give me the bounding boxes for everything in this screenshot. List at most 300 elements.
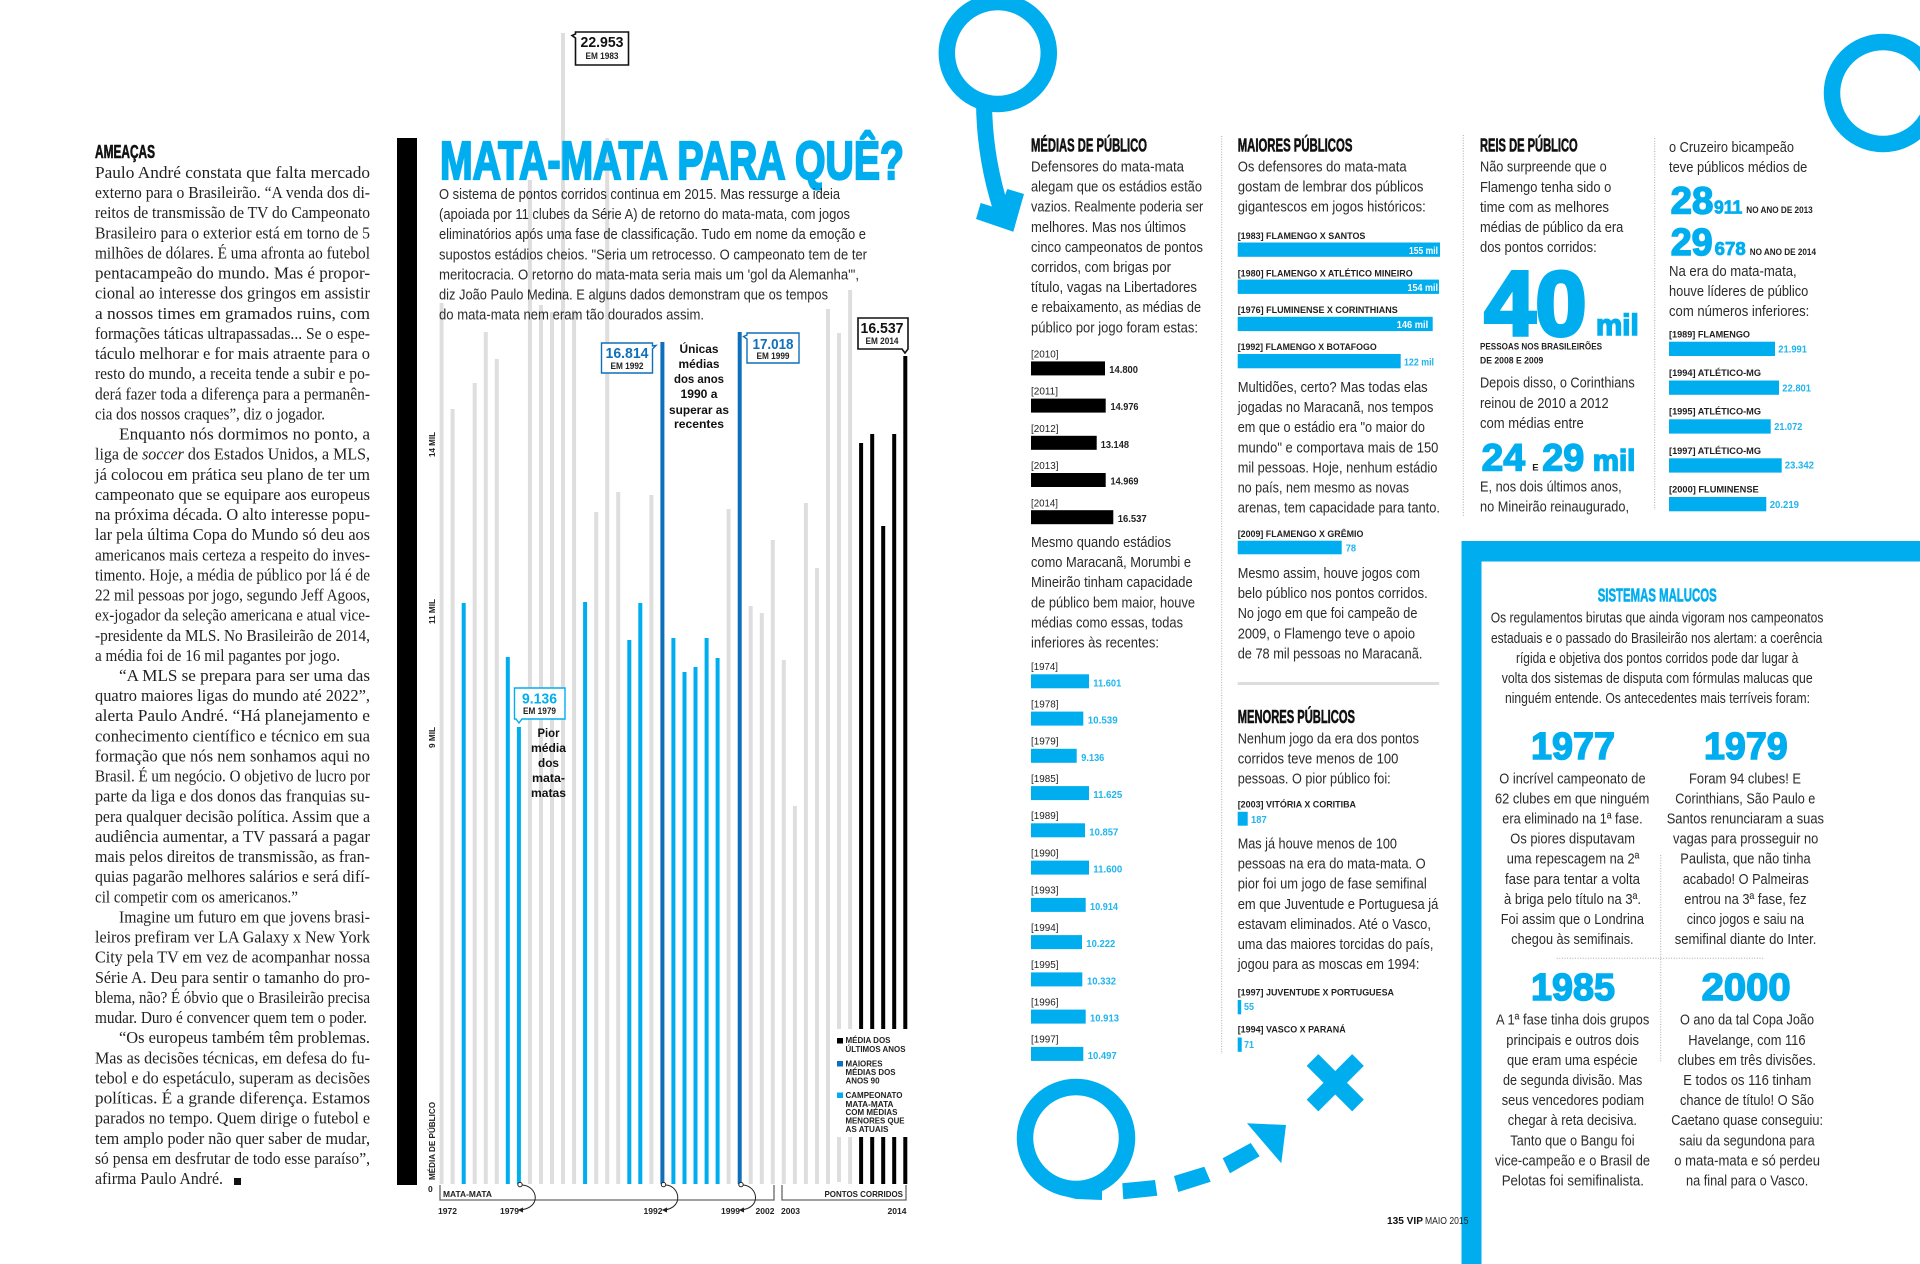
entry: 1979: entrou na 3ª fase, fez xyxy=(1684,891,1807,908)
text block: com médias entre xyxy=(1480,415,1584,432)
annotation: Únicas médias dos anos 1990: 1990 a xyxy=(680,387,718,401)
bar chart: biggest crowds: 154 mil xyxy=(1408,283,1438,294)
text block: vazios. Realmente poderia ser xyxy=(1031,199,1203,216)
text block: Os defensores do mata-mata xyxy=(1238,158,1407,176)
text block: houve líderes de público xyxy=(1669,283,1808,300)
text block: article body: já colocou em prática seu plano de ter um xyxy=(94,465,370,484)
chart x axis: era brackets and years: 2003 xyxy=(781,1206,800,1216)
entry: 1985: que eram uma espécie xyxy=(1507,1052,1638,1069)
entry: 1985: principais e outros dois xyxy=(1506,1032,1639,1049)
text block: article body: mudar. Duro é convencer quem tem o poder. xyxy=(95,1008,367,1027)
callout: 17.018 em 1999: EM 1999 xyxy=(756,351,790,361)
text block: Multidões, certo? Mas todas elas xyxy=(1238,379,1428,396)
legend: ÚLTIMOS ANOS xyxy=(846,1043,906,1054)
text block: jogadas no Maracanã, nos tempos xyxy=(1237,399,1433,416)
bar chart: mata-mata averages: 10.497 xyxy=(1088,1051,1117,1062)
callout: 16.537 em 2014: EM 2014 xyxy=(866,336,898,346)
bar chart: mata-mata averages: [1974] xyxy=(1031,662,1058,673)
annotation: Pior média dos mata-matas: dos xyxy=(538,756,559,770)
icon: tactic circle, top right xyxy=(1832,42,1920,144)
text block: article body: pera qualquer decisão política. Assim que a xyxy=(95,807,371,826)
legend: MÉDIA DOS xyxy=(846,1035,891,1045)
text block: Nenhum jogo da era dos pontos xyxy=(1238,730,1419,748)
bar chart: recent averages: [2014] xyxy=(1031,498,1058,509)
callout: 16.537 em 2014 xyxy=(858,318,908,353)
bar chart: recent averages: 14.976 xyxy=(1110,402,1139,413)
text block: intro: rígida e objetiva dos pontos corridos pode dar lugar à xyxy=(1516,650,1799,667)
callout: 9.136 em 1979: 9.136 xyxy=(522,692,557,708)
bar chart: leaders of the mata-mata era: [1997] ATLÉTICO-MG xyxy=(1669,446,1761,457)
text block: reinou de 2010 a 2012 xyxy=(1480,395,1609,412)
heading: REIS DE PÚBLICO xyxy=(1480,135,1578,156)
bar: Vasco x Paraná xyxy=(1238,1024,1346,1052)
big number: 24 e 29 mil: 29 xyxy=(1542,438,1584,480)
text block: cinco campeonatos de pontos xyxy=(1031,239,1203,256)
chart x axis: era brackets and years: PONTOS CORRIDOS xyxy=(824,1189,903,1199)
text block: article body: cia dos nossos craques”, diz o jogador. xyxy=(95,404,325,423)
bar chart: mata-mata averages: [1994] xyxy=(1031,923,1059,934)
callout: 17.018 em 1999: 17.018 xyxy=(752,337,794,353)
text block: Flamengo tenha sido o xyxy=(1480,179,1611,196)
bar chart: leaders of the mata-mata era: 20.219 xyxy=(1770,500,1799,511)
text block: article body: Paulo André constata que falta mercado xyxy=(95,163,370,182)
entry: 1979: 1979 xyxy=(1704,726,1788,768)
entry: 1977: era eliminado na 1ª fase. xyxy=(1502,810,1643,828)
entry: 1977: Os piores disputavam xyxy=(1510,831,1635,848)
bar chart: recent averages: 13.148 xyxy=(1101,440,1129,451)
arrow: 1999 marker xyxy=(739,1182,756,1212)
annotation: Pior média dos mata-matas: média xyxy=(531,741,566,755)
bar chart: leaders of the mata-mata era: [1994] ATLÉTICO-MG xyxy=(1669,368,1761,379)
text block: e rebaixamento, as médias de xyxy=(1031,299,1201,316)
entry: 1985: Tanto que o Bangu foi xyxy=(1510,1132,1635,1149)
text block: article body: 22 mil pessoas por jogo, segundo Jeff Agoos, xyxy=(95,586,370,604)
text block: article body: lar pela última Copa do Mundo só deu aos xyxy=(95,525,370,544)
entry: 1985: de segunda divisão. Mas xyxy=(1503,1072,1642,1089)
text block xyxy=(1031,534,1195,652)
entry: 1985: vice-campeão e o Brasil de xyxy=(1495,1152,1650,1169)
text block: teve públicos médios de xyxy=(1669,159,1807,176)
text block: article body: -presidente da MLS. No Brasileirão de 2014, xyxy=(95,626,370,645)
text block: article body xyxy=(94,163,371,1188)
bar chart: mata-mata averages: 9.136 xyxy=(1081,753,1105,764)
panel: sistemas malucos xyxy=(1462,541,1920,1264)
bar chart: leaders of the mata-mata era: [1989] FLAMENGO xyxy=(1669,329,1750,340)
text block: Depois disso, o Corinthians xyxy=(1480,375,1635,392)
bar: Juventude x Portuguesa: [1997] JUVENTUDE X PORTUGUESA xyxy=(1238,988,1394,999)
bar chart: leaders of the mata-mata era: 21.991 xyxy=(1778,345,1807,356)
text block: em que o estádio era "o maior do xyxy=(1238,419,1425,436)
text block xyxy=(1238,565,1428,662)
bar: Flamengo x Grêmio: [2009] FLAMENGO X GRÊMIO xyxy=(1238,528,1363,540)
bar: Flamengo x Grêmio xyxy=(1238,528,1363,554)
bar chart: mata-mata averages: [1979] xyxy=(1031,736,1059,748)
text block: article body: a nossos times em gramados ruins, com xyxy=(95,304,370,323)
text block: corridos, com brigas por xyxy=(1031,259,1171,276)
text block: article body: leiros prefiram ver LA Galaxy x New York xyxy=(95,928,371,947)
text block: article body: “A MLS se prepara para ser uma das xyxy=(119,666,370,685)
text block: arenas, tem capacidade para tanto. xyxy=(1238,500,1440,517)
heading: Ameaças: AMEAÇAS xyxy=(95,142,155,162)
big number: 40 mil: mil xyxy=(1596,309,1639,342)
text block: Na era do mata-mata, xyxy=(1669,263,1797,280)
text block: article body: pentacampeão do mundo. Mas é propor- xyxy=(95,264,370,283)
bar: Vitória x Coritiba: 187 xyxy=(1251,815,1267,826)
chart x axis: era brackets and years: 2014 xyxy=(888,1206,907,1216)
text block: article body: quatro maiores ligas do mundo até 2022”, xyxy=(95,686,370,705)
bar: Vitória x Coritiba xyxy=(1238,798,1356,826)
text block xyxy=(1480,375,1635,432)
text block: article body: Mas as decisões técnicas, em defesa do fu- xyxy=(95,1048,370,1067)
text block: médias de público da era xyxy=(1480,219,1624,236)
annotation: Únicas médias dos anos 1990: dos anos xyxy=(674,372,724,386)
big number: 24 e 29 mil: 24 xyxy=(1482,438,1525,480)
text block: article body: “Os europeus também têm problemas. xyxy=(119,1028,370,1047)
big number: 40 mil: 40 xyxy=(1484,254,1586,355)
entry: 1977: chegou às semifinais. xyxy=(1511,931,1634,948)
text block: corridos teve menos de 100 xyxy=(1238,751,1398,768)
text block: article body: blema, não? É óbvio que o Brasileirão precisa xyxy=(95,988,371,1007)
entry: 2000: chance de título! O São xyxy=(1680,1092,1814,1109)
big number: 28.911 xyxy=(1671,180,1813,222)
annotation: Únicas médias dos anos 1990: médias xyxy=(678,357,720,371)
annotation: Pior média dos mata-matas: matas xyxy=(531,786,566,800)
text block: no país, nem mesmo as novas xyxy=(1238,480,1409,496)
big number: 24 e 29 mil: E xyxy=(1532,463,1539,474)
bar chart: mata-mata averages: 11.600 xyxy=(1093,865,1123,876)
text block: article body: tem amplo poder não quer saber de mudar, xyxy=(95,1129,370,1148)
heading: SISTEMAS MALUCOS xyxy=(1598,586,1717,606)
big number: 24 e 29 mil: mil xyxy=(1593,445,1635,478)
entry: 1979: Foram 94 clubes! E xyxy=(1689,770,1801,787)
text block: article body: timento. Hoje, a média de público por lá é de xyxy=(95,565,370,584)
text block xyxy=(1238,158,1426,216)
bar chart: mata-mata averages: [1995] xyxy=(1031,960,1059,971)
callout: 16.537 em 2014: 16.537 xyxy=(860,321,904,337)
text block: article body: Brasileiro para o exterior está em torno de 5 xyxy=(95,223,370,242)
icon: tactic X xyxy=(1312,1060,1358,1106)
heading: MÉDIAS DE PÚBLICO xyxy=(1031,134,1147,156)
entry: 2000: 2000 xyxy=(1702,967,1791,1009)
callout: 9.136 em 1979 xyxy=(514,688,565,723)
big number: 29.678: NO ANO DE 2014 xyxy=(1750,247,1817,258)
entry: 1979: vagas para prosseguir no xyxy=(1673,831,1818,848)
entry: 2000: o mata-mata e só perdeu xyxy=(1674,1152,1820,1169)
heading: MENORES PÚBLICOS xyxy=(1238,706,1355,727)
text block: article body: reitos de transmissão de TV do Campeonato xyxy=(95,203,370,222)
bar chart: recent averages: [2011] xyxy=(1031,387,1058,398)
text block: dos pontos corridos: xyxy=(1480,239,1597,256)
entry: 1977: O incrível campeonato de xyxy=(1499,770,1646,787)
text block: público por jogo foram estas: xyxy=(1031,319,1198,336)
bar chart: mata-mata averages: [1989] xyxy=(1031,811,1059,822)
text block: time com as melhores xyxy=(1480,199,1609,216)
text block: article body: milhões de dólares. É uma afronta ao futebol xyxy=(95,244,370,262)
text block: article body: resto do mundo, a receita tende a subir e po- xyxy=(95,364,370,383)
bar chart: biggest crowds: 155 mil xyxy=(1409,246,1438,257)
title: MATA-MATA PARA QUÊ? xyxy=(440,130,904,191)
big number: 24 e 29 mil xyxy=(1482,438,1635,480)
legend: MAIORES xyxy=(846,1058,883,1068)
bar: Vasco x Paraná: 71 xyxy=(1244,1040,1254,1051)
entry: 1979: Corinthians, São Paulo e xyxy=(1675,790,1815,807)
text block xyxy=(1238,730,1419,788)
chart y axis labels: 0 xyxy=(428,1184,433,1194)
big number: 40 mil xyxy=(1480,254,1639,366)
panel: reis de público xyxy=(1480,135,1639,515)
heading: MAIORES PÚBLICOS xyxy=(1238,134,1352,156)
bar chart: mata-mata averages: [1993] xyxy=(1031,886,1059,897)
entry: 1985 xyxy=(1495,967,1650,1190)
entry: 2000: Havelange, com 116 xyxy=(1688,1032,1806,1049)
bar chart: biggest crowds: [1980] FLAMENGO X ATLÉTICO MINEIRO xyxy=(1238,268,1413,279)
entry: 1979 xyxy=(1667,726,1824,948)
entry: 2000: clubes em três divisões. xyxy=(1678,1052,1816,1069)
bar chart: mata-mata averages: 11.601 xyxy=(1093,678,1122,689)
text block: article body: afirma Paulo André. xyxy=(95,1169,223,1188)
entry: 1977: Foi assim que o Londrina xyxy=(1501,911,1645,928)
text block: article body: audiência aumentar, a TV passará a pagar xyxy=(95,827,370,846)
text block: article body: parados no tempo. Quem dirige o futebol e xyxy=(95,1109,370,1128)
bar chart: biggest crowds: [1976] FLUMINENSE X CORINTHIANS xyxy=(1238,305,1398,316)
text block: intro: do mata-mata nem eram tão dourados assim. xyxy=(439,307,704,324)
entry: 2000: E todos os 116 tinham xyxy=(1683,1072,1811,1089)
bar chart: mata-mata averages: 10.857 xyxy=(1089,827,1119,838)
bar: Juventude x Portuguesa xyxy=(1238,988,1394,1014)
text block: de público bem maior, houve xyxy=(1031,594,1195,611)
bar chart: mata-mata averages xyxy=(1031,662,1123,1062)
callout: 16.814 em 1992: EM 1992 xyxy=(610,361,644,371)
legend: MENORES QUE xyxy=(846,1116,905,1126)
annotation: Únicas médias dos anos 1990: superar as xyxy=(669,403,729,417)
text block: article body: a média foi de 16 mil pagantes por jogo. xyxy=(95,646,340,665)
entry: 1977: à briga pelo título na 3ª. xyxy=(1504,891,1641,908)
page footer: 135 VIP xyxy=(1387,1216,1423,1227)
legend: COM MÉDIAS xyxy=(846,1107,898,1117)
text block: intro xyxy=(1491,610,1823,707)
chart y axis labels xyxy=(426,432,437,1194)
text block: article body: parte da liga e dos donos das franquias su- xyxy=(95,787,370,806)
big number: 40 mil: DE 2008 E 2009 xyxy=(1480,355,1543,366)
text block: estavam eliminados. Até o Vasco, xyxy=(1238,916,1431,933)
bar: Vitória x Coritiba: [2003] VITÓRIA X CORITIBA xyxy=(1238,798,1356,810)
text block: Mas já houve menos de 100 xyxy=(1238,836,1397,852)
text block: article body: mais pelos direitos de transmissão, as fran- xyxy=(95,847,370,866)
text block: intro xyxy=(439,186,867,324)
chart x axis: era brackets and years: 1972 xyxy=(438,1206,457,1216)
text block: com números inferiores: xyxy=(1669,303,1809,320)
bar chart: mata-mata averages: [1985] xyxy=(1031,774,1059,785)
text block: article body: cil competir com os americanos.” xyxy=(95,887,298,906)
bar chart: mata-mata averages: [1996] xyxy=(1031,997,1059,1008)
text block: de 78 mil pessoas no Maracanã. xyxy=(1238,645,1422,662)
text block: article body: tebol e do espetáculo, superam as decisões xyxy=(95,1068,370,1087)
panel: menores públicos xyxy=(1237,706,1439,1052)
callout: 22.953 em 1983: EM 1983 xyxy=(586,51,618,61)
text block: article body: Série A. Deu para sentir o tamanho do pro- xyxy=(95,968,370,987)
text block: article body: Enquanto nós dormimos no ponto, a xyxy=(119,425,371,444)
bar chart: mata-mata averages: [1990] xyxy=(1031,848,1059,859)
text block xyxy=(1237,836,1439,973)
text block: article body: táculo melhorar e for mais atraente para o xyxy=(95,344,370,363)
legend: MATA-MATA xyxy=(846,1099,894,1109)
text block: belo público nos pontos corridos. xyxy=(1238,585,1428,602)
text block xyxy=(1031,158,1203,336)
text block: article body: alerta Paulo André. “Há planejamento e xyxy=(95,706,370,725)
text block: article body: formações táticas ultrapassadas... Se o espe- xyxy=(95,324,370,343)
bar chart: leaders of the mata-mata era: 22.801 xyxy=(1782,383,1811,394)
text block xyxy=(1480,478,1629,515)
legend: MÉDIAS DOS xyxy=(846,1067,896,1077)
text block: Mesmo quando estádios xyxy=(1031,534,1171,551)
bar chart: recent averages: [2010] xyxy=(1031,350,1059,360)
text block xyxy=(1669,263,1809,320)
text block: o Cruzeiro bicampeão xyxy=(1669,139,1794,156)
panel: Cruzeiro and leaders xyxy=(1669,139,1817,511)
callout: 22.953 em 1983: 22.953 xyxy=(580,34,624,51)
bar: Juventude x Portuguesa: 55 xyxy=(1244,1002,1254,1013)
chart y axis labels: MÉDIA DE PÚBLICO xyxy=(426,1102,437,1180)
big number: 29.678: 678 xyxy=(1715,239,1746,259)
entry: 1979: semifinal diante do Inter. xyxy=(1675,931,1816,948)
bar chart: recent averages: 16.537 xyxy=(1118,514,1147,525)
big number: 29.678: 29 xyxy=(1671,222,1713,264)
bar: Flamengo x Grêmio: 78 xyxy=(1346,543,1356,554)
text block: alegam que os estádios estão xyxy=(1031,179,1202,196)
text block: article body: formação que nós nem sonhamos aqui no xyxy=(95,746,370,766)
annotation: Pior média dos mata-matas: mata- xyxy=(532,771,565,785)
annotation: Pior média dos mata-matas xyxy=(531,726,566,800)
text block: como Maracanã, Morumbi e xyxy=(1031,554,1191,571)
legend: CAMPEONATO xyxy=(846,1090,903,1100)
text block: intro: supostos estádios cheios. "Seria um retrocesso. O campeonato tem de ter xyxy=(439,246,867,263)
text block: gigantescos em jogos históricos: xyxy=(1238,199,1426,216)
bar chart: mata-mata averages: 10.539 xyxy=(1088,716,1118,727)
entry: 2000: saiu da segundona para xyxy=(1679,1132,1815,1149)
icon: tactic circle with arrow, top xyxy=(947,2,1049,232)
bar chart: leaders of the mata-mata era xyxy=(1669,329,1814,511)
bar chart: mata-mata averages: 10.913 xyxy=(1090,1014,1119,1025)
text block: uma das maiores torcidas do país, xyxy=(1238,936,1433,953)
big number: 29.678 xyxy=(1671,222,1817,264)
big number: 28.911: 28 xyxy=(1671,180,1713,222)
callout: 22.953 em 1983 xyxy=(572,32,628,65)
bar chart: mata-mata averages: [1997] xyxy=(1031,1035,1059,1046)
text block: article body: quias pagarão melhores salários e será difí- xyxy=(95,867,370,886)
annotation: Únicas médias dos anos 1990: Únicas xyxy=(680,341,719,356)
bar chart: leaders of the mata-mata era: 21.072 xyxy=(1774,422,1803,433)
bar chart: mata-mata averages: 10.332 xyxy=(1087,976,1116,988)
bar chart: biggest crowds: [1992] FLAMENGO X BOTAFOGO xyxy=(1238,342,1377,353)
big number: 40 mil: PESSOAS NOS BRASILEIRÕES xyxy=(1480,342,1602,353)
text block: Mineirão tinham capacidade xyxy=(1031,574,1193,591)
text block: article body: só pensa em desfrutar de todo esse paraíso”, xyxy=(95,1149,370,1168)
text block xyxy=(1669,139,1807,176)
bar chart: biggest crowds: [1983] FLAMENGO X SANTOS xyxy=(1238,231,1365,242)
text block: article body: Imagine um futuro em que jovens brasi- xyxy=(119,907,370,926)
panel: maiores públicos xyxy=(1237,134,1440,662)
bar chart: recent averages: 14.969 xyxy=(1110,477,1139,488)
text block: article body: campeonato que se equipare aos europeus xyxy=(95,485,370,504)
text block: article body: derá fazer toda a diferença para a permanên- xyxy=(95,384,370,403)
legend xyxy=(833,1029,910,1137)
callout: 17.018 em 1999 xyxy=(744,333,799,363)
bar chart: leaders of the mata-mata era: [2000] FLUMINENSE xyxy=(1669,485,1759,496)
text block: article body: conhecimento científico e técnico em sua xyxy=(95,726,371,745)
text block: article body: liga de soccer dos Estados Unidos, a MLS, xyxy=(95,445,370,464)
bar chart: mata-mata averages: 10.222 xyxy=(1086,939,1116,950)
panel: vertical black bar xyxy=(397,138,417,1185)
legend: AS ATUAIS xyxy=(846,1124,889,1134)
annotation: Pior média dos mata-matas: Pior xyxy=(538,726,560,740)
text block: pessoas. O pior público foi: xyxy=(1238,771,1391,788)
entry: 1979: Paulista, que não tinha xyxy=(1680,851,1811,868)
text block: intro: eliminatórios após uma fase de classificação. Tudo em nome da emoção e xyxy=(439,226,866,243)
text block: article body: americanos mais certeza a respeito do inves- xyxy=(95,545,370,564)
entry: 2000: Caetano quase conseguiu: xyxy=(1671,1112,1823,1129)
bar chart: leaders of the mata-mata era: 23.342 xyxy=(1785,461,1814,472)
text block: article body: políticas. É a grande diferença. Estamos xyxy=(95,1088,370,1108)
text block: Mesmo assim, houve jogos com xyxy=(1238,565,1420,582)
bar chart: biggest crowds xyxy=(1238,231,1440,369)
text block: Defensores do mata-mata xyxy=(1031,158,1185,176)
callout: 16.814 em 1992: 16.814 xyxy=(606,346,648,362)
text block: mundo" e comportava mais de 150 xyxy=(1238,439,1438,456)
entry: 1985: A 1ª fase tinha dois grupos xyxy=(1496,1012,1649,1029)
text block: intro: volta dos sistemas de disputa com fórmulas malucas que xyxy=(1502,670,1813,687)
chart x axis: era brackets and years: 1992 xyxy=(644,1206,663,1216)
page footer xyxy=(1387,1216,1469,1227)
icon: tactic circle with dashed arrow, bottom xyxy=(1025,1087,1286,1200)
text block: jogou para as moscas em 1994: xyxy=(1237,956,1419,973)
text block: título, vagas na Libertadores xyxy=(1031,279,1197,296)
entry: 2000: na final para o Vasco. xyxy=(1686,1172,1808,1190)
big number: 28.911: 911 xyxy=(1714,197,1742,217)
text block xyxy=(1237,379,1440,517)
bar chart: leaders of the mata-mata era: [1995] ATLÉTICO-MG xyxy=(1669,407,1761,418)
chart y axis labels: 14 MIL xyxy=(427,432,437,457)
page footer: MAIO 2015 xyxy=(1425,1216,1469,1227)
entry: 2000: O ano da tal Copa João xyxy=(1680,1012,1814,1029)
entry: 1985: seus vencedores podiam xyxy=(1502,1092,1644,1109)
entry: 1985: chegar à reta decisiva. xyxy=(1508,1112,1637,1129)
chart y axis labels: 9 MIL xyxy=(427,727,437,748)
chart y axis labels: 11 MIL xyxy=(427,599,437,624)
entry: 1985: 1985 xyxy=(1531,967,1615,1009)
big number: 28.911: NO ANO DE 2013 xyxy=(1746,205,1813,216)
chart x axis: era brackets and years xyxy=(438,1185,907,1216)
text block: no Mineirão reinaugurado, xyxy=(1480,498,1629,515)
panel frame: blue L-shaped border xyxy=(1462,541,1920,1264)
text block: Não surpreende que o xyxy=(1480,159,1607,176)
text block: melhores. Mas nos últimos xyxy=(1031,219,1186,236)
text block: article body: ex-jogador da seleção americana e atual vice- xyxy=(95,606,370,625)
bar chart: biggest crowds: 122 mil xyxy=(1404,358,1434,369)
text block: intro: meritocracia. O retorno do mata-mata seria mais um 'gol da Alemanha'", xyxy=(439,266,859,283)
legend: ANOS 90 xyxy=(846,1076,880,1086)
bar chart: recent averages: [2012] xyxy=(1031,424,1059,435)
entry: 1979: acabado! O Palmeiras xyxy=(1683,871,1809,888)
text block: intro: diz João Paulo Medina. E alguns dados demonstram que os tempos xyxy=(439,286,828,304)
text block: article body: cional ao interesse dos gringos em assistir xyxy=(95,284,370,303)
text block: No jogo em que foi campeão de xyxy=(1238,605,1417,622)
bar chart: biggest crowds: 146 mil xyxy=(1397,320,1428,331)
entry: 1985: Pelotas foi semifinalista. xyxy=(1502,1172,1644,1190)
bar chart: mata-mata averages: 11.625 xyxy=(1093,790,1123,801)
text block: 2009, o Flamengo teve o apoio xyxy=(1238,625,1415,642)
text block: intro: O sistema de pontos corridos continua em 2015. Mas ressurge a ideia xyxy=(439,186,841,203)
entry: 1977: uma repescagem na 2ª xyxy=(1507,851,1640,868)
